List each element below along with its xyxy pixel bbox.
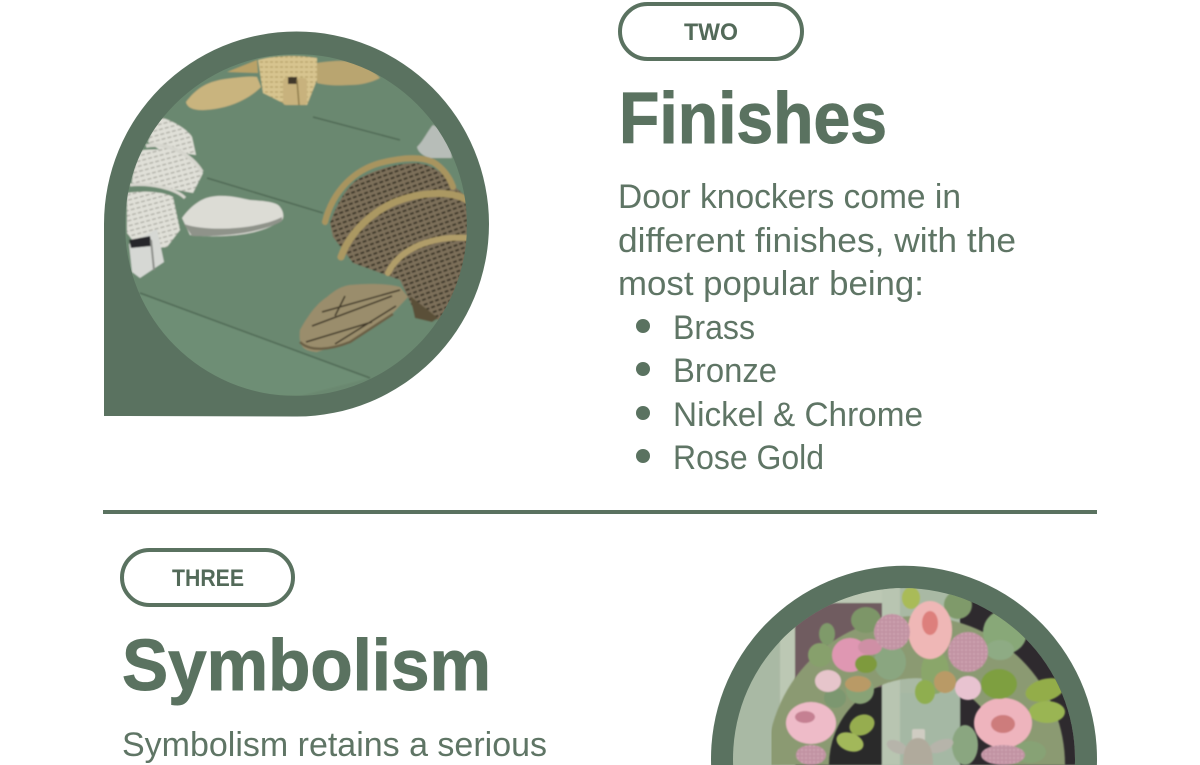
- pink and green balls: [796, 614, 1025, 765]
- heading: finishes: Finishes: [619, 79, 887, 159]
- door background: [780, 585, 1080, 765]
- heading: symbolism: Symbolism: [122, 626, 491, 706]
- divider: [103, 510, 1097, 514]
- list: popular finishes: Brass: [673, 309, 755, 347]
- peonies: [786, 601, 1032, 748]
- bronze knocker: [300, 158, 467, 352]
- foliage ring: [798, 647, 1034, 765]
- list: popular finishes: [636, 309, 923, 477]
- image: wreath and bee knocker in arch frame: [711, 566, 1097, 765]
- bee knocker: [884, 729, 955, 765]
- text block: finishes intro: different finishes, with the: [618, 222, 1016, 260]
- silver knocker: [127, 118, 283, 278]
- image: door knocker finishes in teardrop frame: [104, 31, 489, 416]
- pill label: three: THREE: [172, 565, 244, 592]
- text block: symbolism intro: Symbolism retains a serious: [122, 726, 547, 764]
- list: popular finishes: Rose Gold: [673, 439, 824, 477]
- pill label: two: TWO: [684, 19, 738, 46]
- pill label: three: [122, 550, 293, 605]
- text block: finishes intro: most popular being:: [618, 265, 924, 303]
- list: popular finishes: Nickel & Chrome: [673, 396, 923, 434]
- brass knocker: [186, 56, 380, 110]
- pill label: two: [620, 4, 802, 59]
- text block: finishes intro: Door knockers come in: [618, 178, 961, 216]
- small silver wing: [417, 125, 452, 158]
- wreath flowers: [786, 587, 1067, 765]
- list: popular finishes: Bronze: [673, 352, 777, 390]
- text block: finishes intro: [618, 178, 1016, 303]
